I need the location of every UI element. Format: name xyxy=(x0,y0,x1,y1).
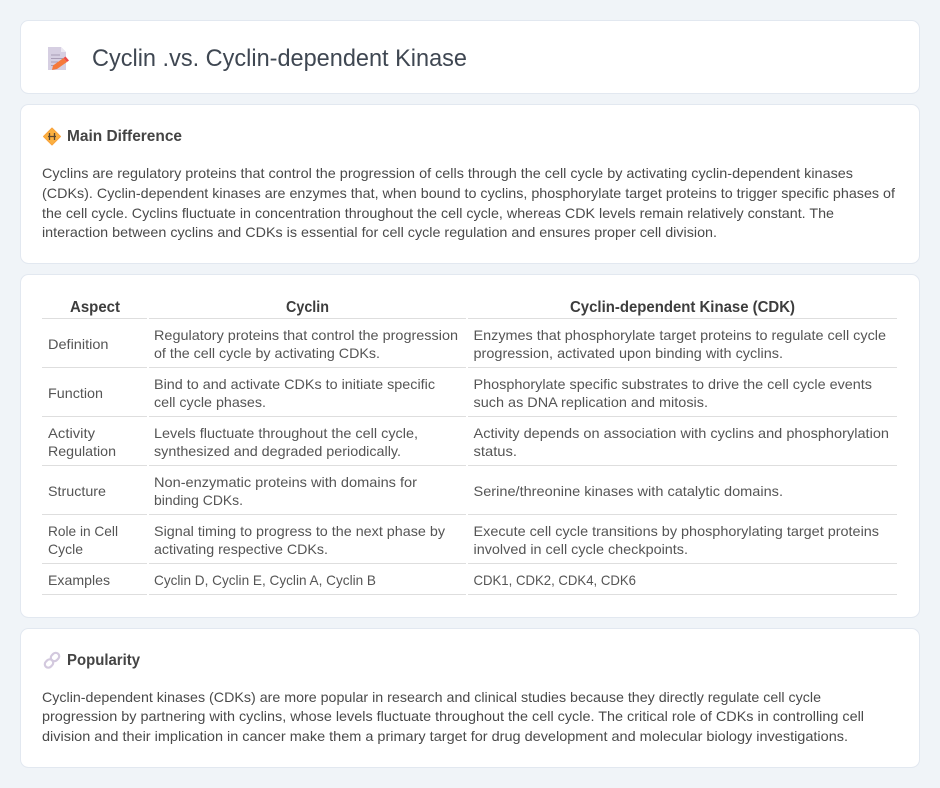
table header row: Cyclin-dependent Kinase (CDK) xyxy=(570,299,795,316)
table row: role in cell cycle: Role in Cell xyxy=(48,523,118,539)
text block: popularity paragraph xyxy=(42,689,864,744)
table row: examples: Examples xyxy=(48,572,110,588)
icon: chain link xyxy=(43,651,61,669)
table row: role in cell cycle: Cycle xyxy=(48,541,83,557)
table row: structure: Non-enzymatic proteins with domains for xyxy=(154,474,417,490)
table row: definition: of the cell cycle by activating CDKs. xyxy=(154,345,380,361)
table row: definition: Enzymes that phosphorylate target proteins to regulate cell cycle xyxy=(474,327,886,343)
title: Cyclin .vs. Cyclin-dependent Kinase xyxy=(92,45,467,72)
table row: activity regulation: synthesized and degraded periodically. xyxy=(154,443,401,459)
table row: role in cell cycle: involved in cell cycle checkpoints. xyxy=(474,541,688,557)
table row: activity regulation xyxy=(48,425,889,459)
table row: definition: Regulatory proteins that control the progression xyxy=(154,327,458,343)
text block: main difference paragraph: the cell cycle. Cyclins fluctuate in concentration throughout the cell cycle, whereas CDK levels remain relatively constant. The xyxy=(42,205,834,221)
table row: function: Function xyxy=(48,385,103,401)
text block: popularity paragraph: Cyclin-dependent kinases (CDKs) are more popular in research and clinical studies because they directly regulate cell cycle xyxy=(42,689,821,705)
table row: role in cell cycle xyxy=(48,523,879,557)
text block: popularity paragraph: division and their implication in cancer make them a primary target for drug development and molecular biology investigations. xyxy=(42,728,848,744)
heading: popularity: Popularity xyxy=(67,652,140,669)
table row: function: cell cycle phases. xyxy=(154,394,266,410)
text block: main difference paragraph: Cyclins are regulatory proteins that control the progression of cells through the cell cycle by activating cyclin-dependent kinases xyxy=(42,165,853,181)
table row: function xyxy=(48,376,872,410)
icon: warning diamond xyxy=(44,128,60,145)
panel: popularity xyxy=(20,628,920,768)
table row: function: such as DNA replication and mitosis. xyxy=(474,394,708,410)
table header row: Aspect xyxy=(70,299,121,316)
table row: structure: Serine/threonine kinases with catalytic domains. xyxy=(474,483,783,499)
table row: examples xyxy=(48,572,636,588)
table row: role in cell cycle: Signal timing to progress to the next phase by xyxy=(154,523,445,539)
text block: main difference paragraph: interaction between cyclins and CDKs is essential for cell cycle regulation and ensures proper cell division. xyxy=(42,224,717,240)
table row: definition: progression, activated upon binding with cyclins. xyxy=(474,345,783,361)
table row: structure xyxy=(48,474,783,508)
table row: definition: Definition xyxy=(48,336,108,352)
table row: examples: Cyclin D, Cyclin E, Cyclin A, Cyclin B xyxy=(154,572,376,588)
table header row: Cyclin xyxy=(286,299,329,316)
table row: activity regulation: Levels fluctuate throughout the cell cycle, xyxy=(154,425,418,441)
table header row xyxy=(70,299,795,316)
panel: comparison table xyxy=(20,274,920,618)
table row: structure: Structure xyxy=(48,483,106,499)
table row: activity regulation: Activity depends on association with cyclins and phosphorylation xyxy=(474,425,889,441)
table row: activity regulation: Regulation xyxy=(48,443,116,459)
text block: main difference paragraph xyxy=(42,165,895,240)
icon: document with pencil xyxy=(48,47,69,70)
table row: function: Phosphorylate specific substrates to drive the cell cycle events xyxy=(474,376,872,392)
text block: popularity paragraph: progression by partnering with cyclins, whose levels fluctuate throughout the cell cycle. The critical role of CDKs in controlling cell xyxy=(42,708,864,724)
heading: main difference: Main Difference xyxy=(67,128,182,145)
text block: main difference paragraph: (CDKs). Cyclin-dependent kinases are enzymes that, when bound to cyclins, phosphorylate target proteins to trigger specific phases of xyxy=(42,185,895,201)
table row: role in cell cycle: Execute cell cycle transitions by phosphorylating target proteins xyxy=(474,523,879,539)
panel: title header xyxy=(20,20,920,94)
table row: definition xyxy=(48,327,886,361)
table row: activity regulation: Activity xyxy=(48,425,95,441)
table row: activity regulation: status. xyxy=(474,443,517,459)
panel: main difference xyxy=(20,104,920,264)
table row: role in cell cycle: activating respective CDKs. xyxy=(154,541,328,557)
table row: structure: binding CDKs. xyxy=(154,492,243,508)
table row: function: Bind to and activate CDKs to initiate specific xyxy=(154,376,435,392)
table row: examples: CDK1, CDK2, CDK4, CDK6 xyxy=(474,572,636,588)
